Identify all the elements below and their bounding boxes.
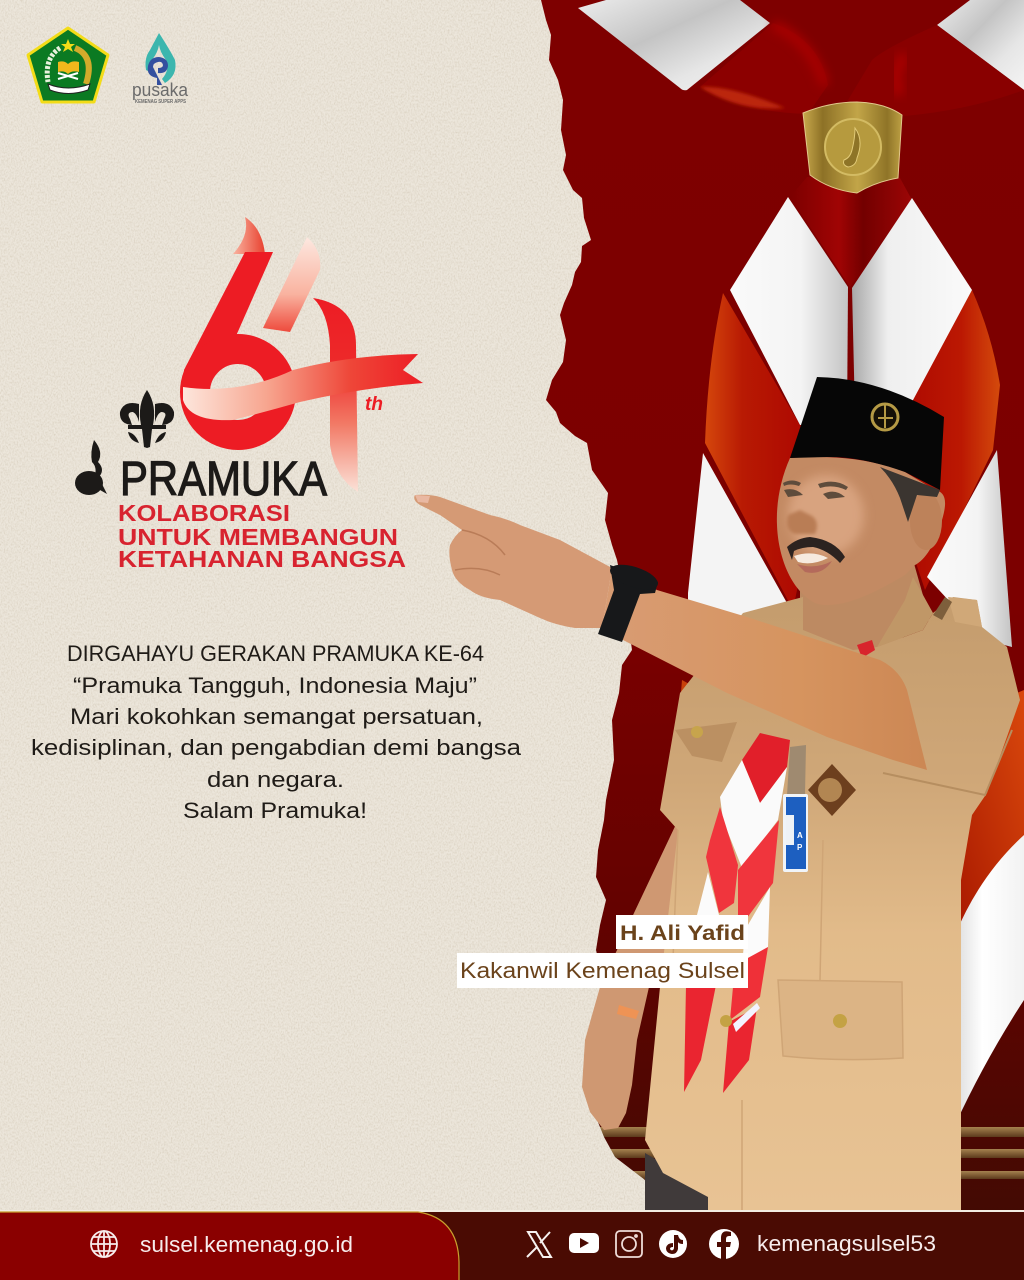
pocket button [691, 726, 703, 738]
logo: Pusaka: pusaka [132, 80, 189, 100]
greeting message: dan negara. [207, 767, 344, 792]
left red and orange tail [705, 293, 830, 610]
hanging arm and hand [582, 820, 690, 1130]
footer bar [0, 1210, 1024, 1280]
lower right white stripe [927, 450, 1012, 647]
right white panel [852, 198, 972, 415]
lower pocket flap [778, 980, 903, 1060]
hair [880, 467, 940, 522]
ID card [783, 794, 808, 872]
neckerchief top right white band [937, 0, 1024, 90]
logo: Pramuka 64th [75, 217, 423, 572]
tunas kelapa icon [75, 440, 107, 495]
lower left white stripe [688, 453, 800, 625]
trousers [645, 1153, 708, 1210]
pointing hand [414, 495, 612, 628]
button behind scarf [720, 1015, 732, 1027]
cap badge [872, 403, 898, 430]
shirt body [645, 597, 1020, 1210]
icon: globe [91, 1231, 117, 1257]
forearm and upper arm [602, 568, 927, 770]
scout neckerchief background illustration [578, 0, 1024, 1125]
greeting message: Salam Pramuka! [183, 798, 367, 823]
teeth [794, 553, 828, 563]
ear [910, 492, 942, 550]
greeting message: kedisiplinan, dan pengabdian demi bangsa [31, 735, 522, 760]
diamond badge [808, 764, 856, 816]
social handle: kemenagsulsel53 [757, 1231, 936, 1256]
right red and orange tail [870, 290, 1000, 590]
left orange sliver [675, 680, 700, 765]
logo: Pusaka [132, 33, 189, 105]
name label [616, 915, 748, 949]
knot lower section [790, 177, 912, 287]
scarf [684, 733, 790, 1093]
neckerchief top left white band [578, 0, 770, 90]
fleur-de-lis [120, 390, 174, 448]
numeral 4 light stroke [263, 237, 320, 332]
ID card: P [797, 843, 803, 852]
neck [800, 560, 930, 665]
role label [457, 953, 748, 988]
greeting message: “Pramuka Tangguh, Indonesia Maju” [73, 673, 477, 698]
greeting message [31, 641, 522, 823]
torn paper background [0, 0, 660, 1212]
icon: TikTok [659, 1230, 687, 1258]
person: H. Ali Yafid [414, 377, 1020, 1210]
left white panel [730, 197, 848, 425]
lower right orange band [955, 690, 1024, 930]
ribbon [183, 354, 423, 420]
gold stripes [590, 1127, 1024, 1179]
slogan: KETAHANAN BANGSA [118, 546, 406, 572]
scarf at collar [857, 640, 875, 658]
PRAMUKA wordmark: PRAMUKA [120, 453, 327, 506]
shirt fold lines [672, 830, 823, 1210]
logo: Pusaka: KEMENAG SUPER APPS [135, 99, 187, 105]
knot wings [700, 23, 828, 114]
slogan [118, 500, 406, 572]
lower pocket button [833, 1014, 847, 1028]
website: sulsel.kemenag.go.id [140, 1232, 353, 1257]
background: dark red panel [500, 0, 1024, 1212]
lips [797, 561, 832, 573]
sleeve cuff line [883, 730, 1012, 795]
left chest pocket flap [675, 722, 737, 762]
wristwatch [598, 560, 661, 642]
slogan: UNTUK MEMBANGUN [118, 524, 398, 550]
name label: H. Ali Yafid [620, 922, 745, 945]
numeral 6 flame [233, 217, 265, 254]
icon: Instagram [616, 1231, 642, 1257]
numeral 4 arc [313, 298, 358, 492]
eyes [783, 480, 803, 497]
th suffix: th [365, 394, 383, 415]
gold woggle [803, 102, 902, 193]
role label: Kakanwil Kemenag Sulsel [460, 958, 745, 983]
lower right white curve [955, 835, 1024, 1125]
lanyard [787, 745, 806, 795]
greeting message: Mari kokohkan semangat persatuan, [70, 704, 483, 729]
icon: YouTube [569, 1233, 599, 1253]
nose shadow [787, 510, 817, 534]
logo: Kementerian Agama emblem [28, 28, 108, 102]
mustache [787, 537, 845, 563]
ID card: A [797, 831, 803, 840]
shirt collar right flap [877, 577, 933, 647]
greeting message: DIRGAHAYU GERAKAN PRAMUKA KE-64 [67, 641, 484, 666]
head [777, 457, 945, 605]
footer left red tab [0, 1212, 459, 1280]
icon: Facebook [709, 1229, 739, 1259]
black cap [790, 377, 944, 490]
slogan: KOLABORASI [118, 500, 290, 526]
wrist band [617, 1005, 639, 1019]
icon: X [527, 1232, 551, 1257]
epaulette [948, 597, 982, 627]
numeral 6 [184, 252, 281, 435]
